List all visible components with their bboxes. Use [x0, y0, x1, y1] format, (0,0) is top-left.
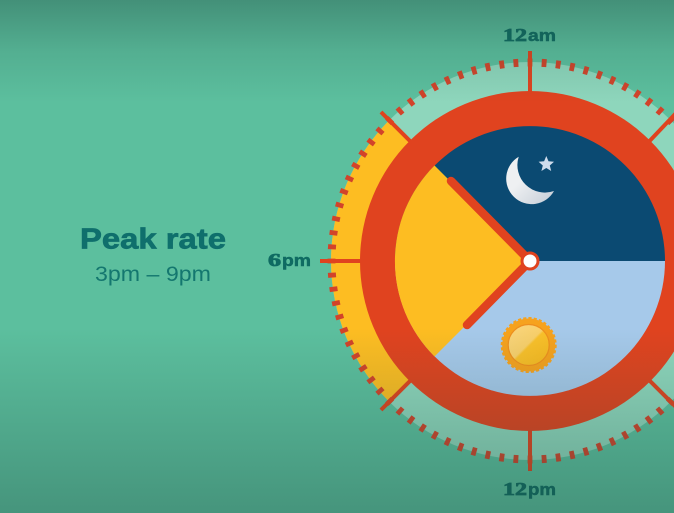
icon: star — [539, 156, 554, 171]
label: 6pm: 6 — [268, 250, 281, 270]
clock hand: lower — [467, 261, 530, 325]
icon: moon — [506, 157, 554, 204]
night sky — [395, 126, 665, 261]
label: 12pm: pm — [528, 480, 556, 499]
label: 12am — [503, 25, 556, 45]
major tick 3am — [642, 110, 674, 149]
peak rate outer band — [331, 120, 530, 402]
major tick 6pm — [320, 259, 370, 263]
clock dial — [320, 51, 674, 471]
icon: sun — [502, 318, 556, 372]
red ring — [360, 91, 674, 431]
major tick 9am — [642, 373, 674, 410]
label: 12am: am — [528, 26, 556, 45]
major tick 12pm — [528, 422, 532, 471]
heading: Peak rate: Peak rate — [80, 224, 226, 256]
label: 12pm: 12 — [503, 479, 527, 499]
label: 12pm — [503, 479, 556, 499]
peak wedge — [395, 166, 530, 356]
clock hand: upper — [451, 181, 530, 261]
outer track — [331, 62, 674, 460]
minute ticks — [332, 62, 674, 460]
label: 6pm — [268, 250, 311, 270]
clock hub — [522, 253, 538, 269]
label: 12am: 12 — [503, 25, 527, 45]
major tick 12am — [528, 51, 532, 100]
major tick 3pm — [381, 373, 418, 410]
major tick 9pm — [381, 112, 418, 149]
text: peak hours: 3pm – 9pm — [95, 263, 211, 286]
label: 6pm: pm — [282, 251, 311, 270]
day sky — [395, 261, 665, 396]
